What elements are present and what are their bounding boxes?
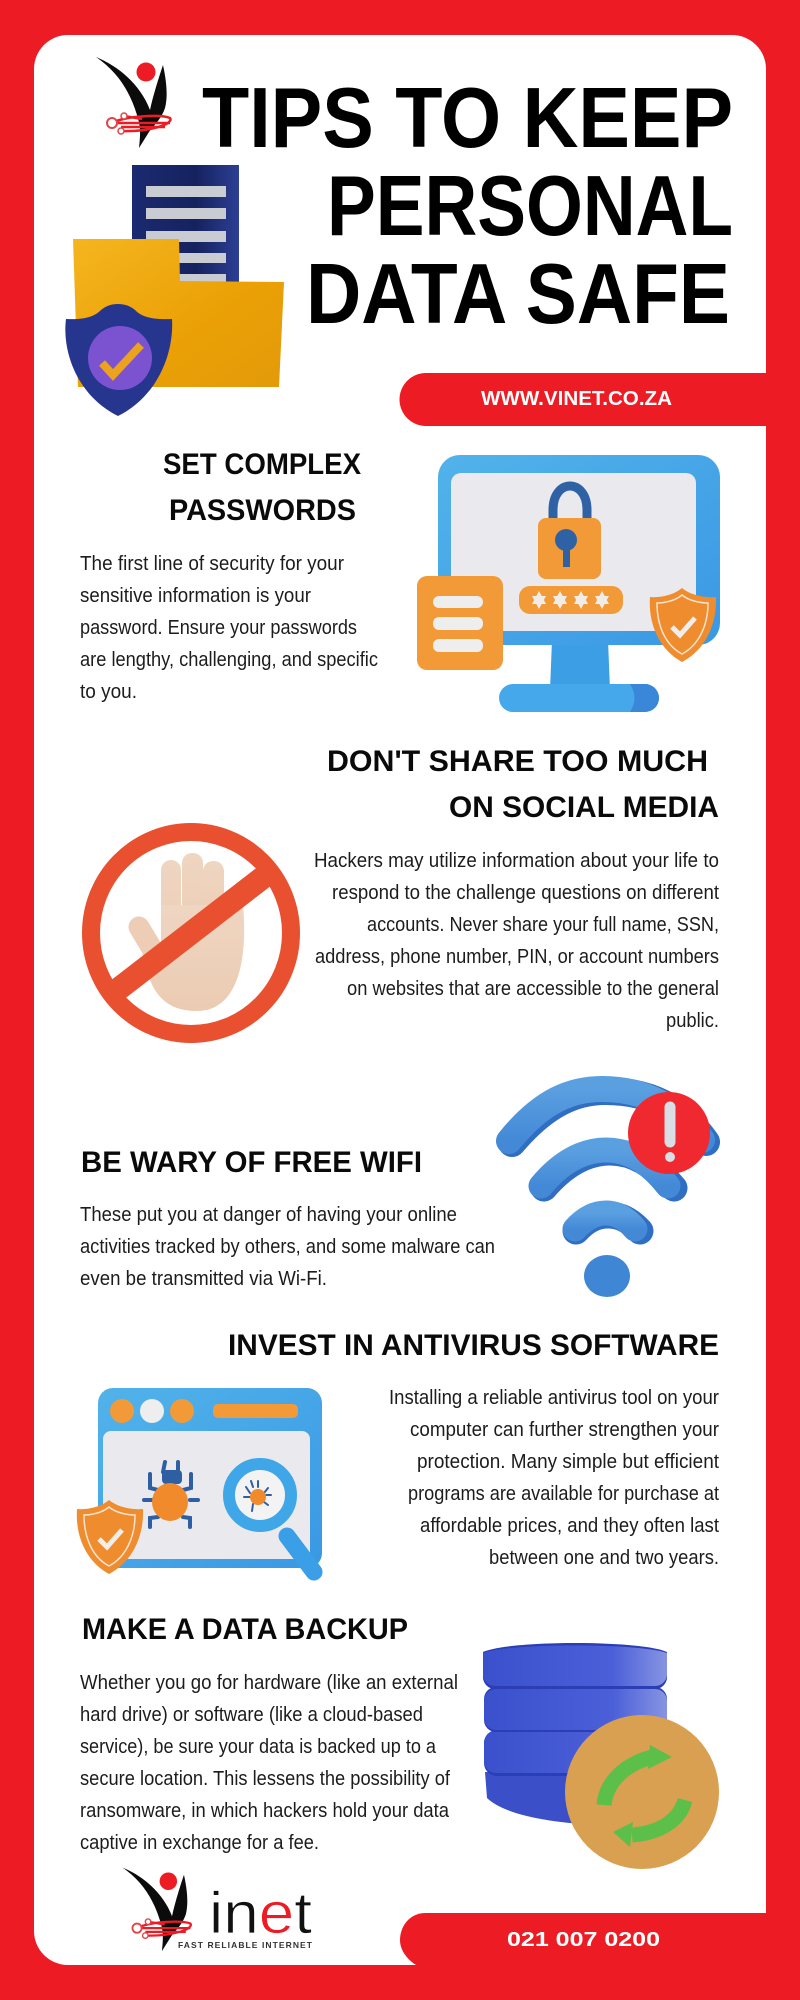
stand	[550, 640, 610, 690]
hand	[137, 853, 244, 1011]
title: DATA SAFE	[306, 247, 730, 342]
shackle	[553, 486, 587, 520]
title: TIPS TO KEEP	[202, 71, 733, 166]
text: backup body: Whether you go for hardware (like an external	[80, 1672, 458, 1694]
phone pill: 021 007 0200	[507, 1929, 660, 1951]
panel corner fill: lower right red	[700, 1913, 766, 1965]
text: social media body: address, phone number, PIN, or account numbers	[315, 946, 719, 968]
heading: set complex passwords	[163, 448, 361, 527]
wifi arc large	[509, 1089, 702, 1141]
text: backup body: ransomware, in which hackers hold your data	[80, 1800, 450, 1822]
screen	[451, 473, 696, 631]
title: PERSONAL	[327, 159, 733, 254]
sync arrows	[604, 1745, 685, 1847]
text: passwords body: sensitive information is your	[80, 585, 311, 607]
text: wifi body	[80, 1204, 495, 1290]
text: backup body: captive in exchange for a fee.	[80, 1832, 319, 1854]
shield badge	[88, 326, 152, 390]
text: wifi body: These put you at danger of having your online	[80, 1204, 457, 1226]
title	[202, 71, 733, 342]
wifi arc medium shadow	[544, 1152, 674, 1188]
text: passwords body	[80, 553, 378, 703]
wifi dot	[584, 1255, 630, 1297]
text: passwords body: are lengthy, challenging, and specific	[80, 649, 378, 671]
text: backup body: secure location. This lessens the possibility of	[80, 1768, 450, 1790]
website pill: WWW.VINET.CO.ZA	[481, 388, 672, 410]
text: social media body: Hackers may utilize information about your life to	[314, 850, 719, 872]
text: antivirus body: affordable prices, and they often last	[420, 1515, 719, 1537]
wifi arc medium	[541, 1150, 668, 1186]
lock body	[538, 518, 601, 579]
website pill	[400, 373, 766, 426]
icon: wifi warning	[509, 1089, 710, 1297]
password stars	[532, 591, 609, 609]
magnifier	[229, 1464, 314, 1572]
heading: make a data backup: MAKE A DATA BACKUP	[82, 1613, 408, 1646]
keyhole	[555, 529, 577, 567]
monitor frame	[438, 455, 720, 645]
prohibition ring	[91, 832, 291, 1034]
text: antivirus body	[389, 1387, 719, 1569]
heading: invest in antivirus software: INVEST IN ANTIVIRUS SOFTWARE	[228, 1329, 719, 1362]
text: social media body: accounts. Never share your full name, SSN,	[367, 914, 719, 936]
window buttons	[110, 1399, 298, 1423]
window frame	[98, 1388, 322, 1568]
heading: don't share too much: DON'T SHARE TOO MUCH	[327, 745, 708, 778]
text: backup body: hard drive) or software (like a cloud-based	[80, 1704, 423, 1726]
heading: be wary of free wifi: BE WARY OF FREE WIFI	[81, 1146, 422, 1179]
heading: set complex passwords: PASSWORDS	[169, 494, 356, 527]
shield	[650, 588, 716, 662]
icon: stop hand	[91, 832, 291, 1034]
logo: Vinet mark top	[96, 57, 170, 148]
heading: set complex passwords: SET COMPLEX	[163, 448, 361, 481]
text: antivirus body: Installing a reliable antivirus tool on your	[389, 1387, 719, 1409]
window body	[103, 1431, 310, 1559]
shield	[77, 1500, 143, 1574]
logo: Vinet full	[122, 1867, 313, 1951]
warning badge	[628, 1092, 710, 1174]
card lines	[433, 596, 483, 652]
text: antivirus body: programs are available for purchase at	[408, 1483, 719, 1505]
phone pill	[400, 1913, 766, 1965]
shield	[65, 304, 172, 416]
text: passwords body: to you.	[80, 681, 137, 703]
text: social media body: respond to the challenge questions on different	[332, 882, 719, 904]
sync badge	[565, 1715, 719, 1869]
check mark	[102, 345, 141, 375]
text: passwords body: password. Ensure your passwords	[80, 617, 357, 639]
wifi arc small shadow	[576, 1215, 640, 1231]
heading: don't share too much	[327, 745, 719, 824]
password field	[519, 586, 623, 614]
folder	[73, 239, 284, 387]
wifi arcs shadow	[512, 1091, 706, 1143]
small bug	[244, 1481, 271, 1511]
text: antivirus body: between one and two years.	[489, 1547, 719, 1569]
document lines	[146, 186, 226, 282]
database disks	[483, 1643, 667, 1825]
heading: don't share too much: ON SOCIAL MEDIA	[449, 791, 719, 824]
document	[132, 165, 239, 283]
text: social media body: on websites that are accessible to the general	[347, 978, 719, 1000]
logo mark	[122, 1867, 191, 1951]
text: wifi body: activities tracked by others, and some malware can	[80, 1236, 495, 1258]
card	[417, 576, 503, 670]
text: social media body: public.	[666, 1010, 719, 1032]
icon: browser window with bug	[77, 1388, 322, 1574]
logo tagline: FAST RELIABLE INTERNET	[178, 1940, 313, 1950]
text: antivirus body: protection. Many simple but efficient	[417, 1451, 719, 1473]
icon: monitor with padlock	[417, 455, 720, 712]
exclamation mark	[664, 1107, 676, 1142]
logo wordmark: inet	[209, 1881, 312, 1946]
text: backup body	[80, 1672, 458, 1854]
text: social media body	[314, 850, 719, 1032]
bug	[144, 1462, 198, 1527]
text: antivirus body: computer can further strengthen your	[410, 1419, 719, 1441]
icon: folder with document and shield	[65, 165, 284, 416]
wifi arc small	[575, 1213, 635, 1229]
icon: database with sync badge	[483, 1643, 719, 1869]
text: passwords body: The first line of security for your	[80, 553, 344, 575]
text: wifi body: even be transmitted via Wi-Fi.	[80, 1268, 327, 1290]
prohibition slash	[112, 872, 270, 994]
base	[499, 684, 659, 712]
text: backup body: service), be sure your data is backed up to a	[80, 1736, 437, 1758]
